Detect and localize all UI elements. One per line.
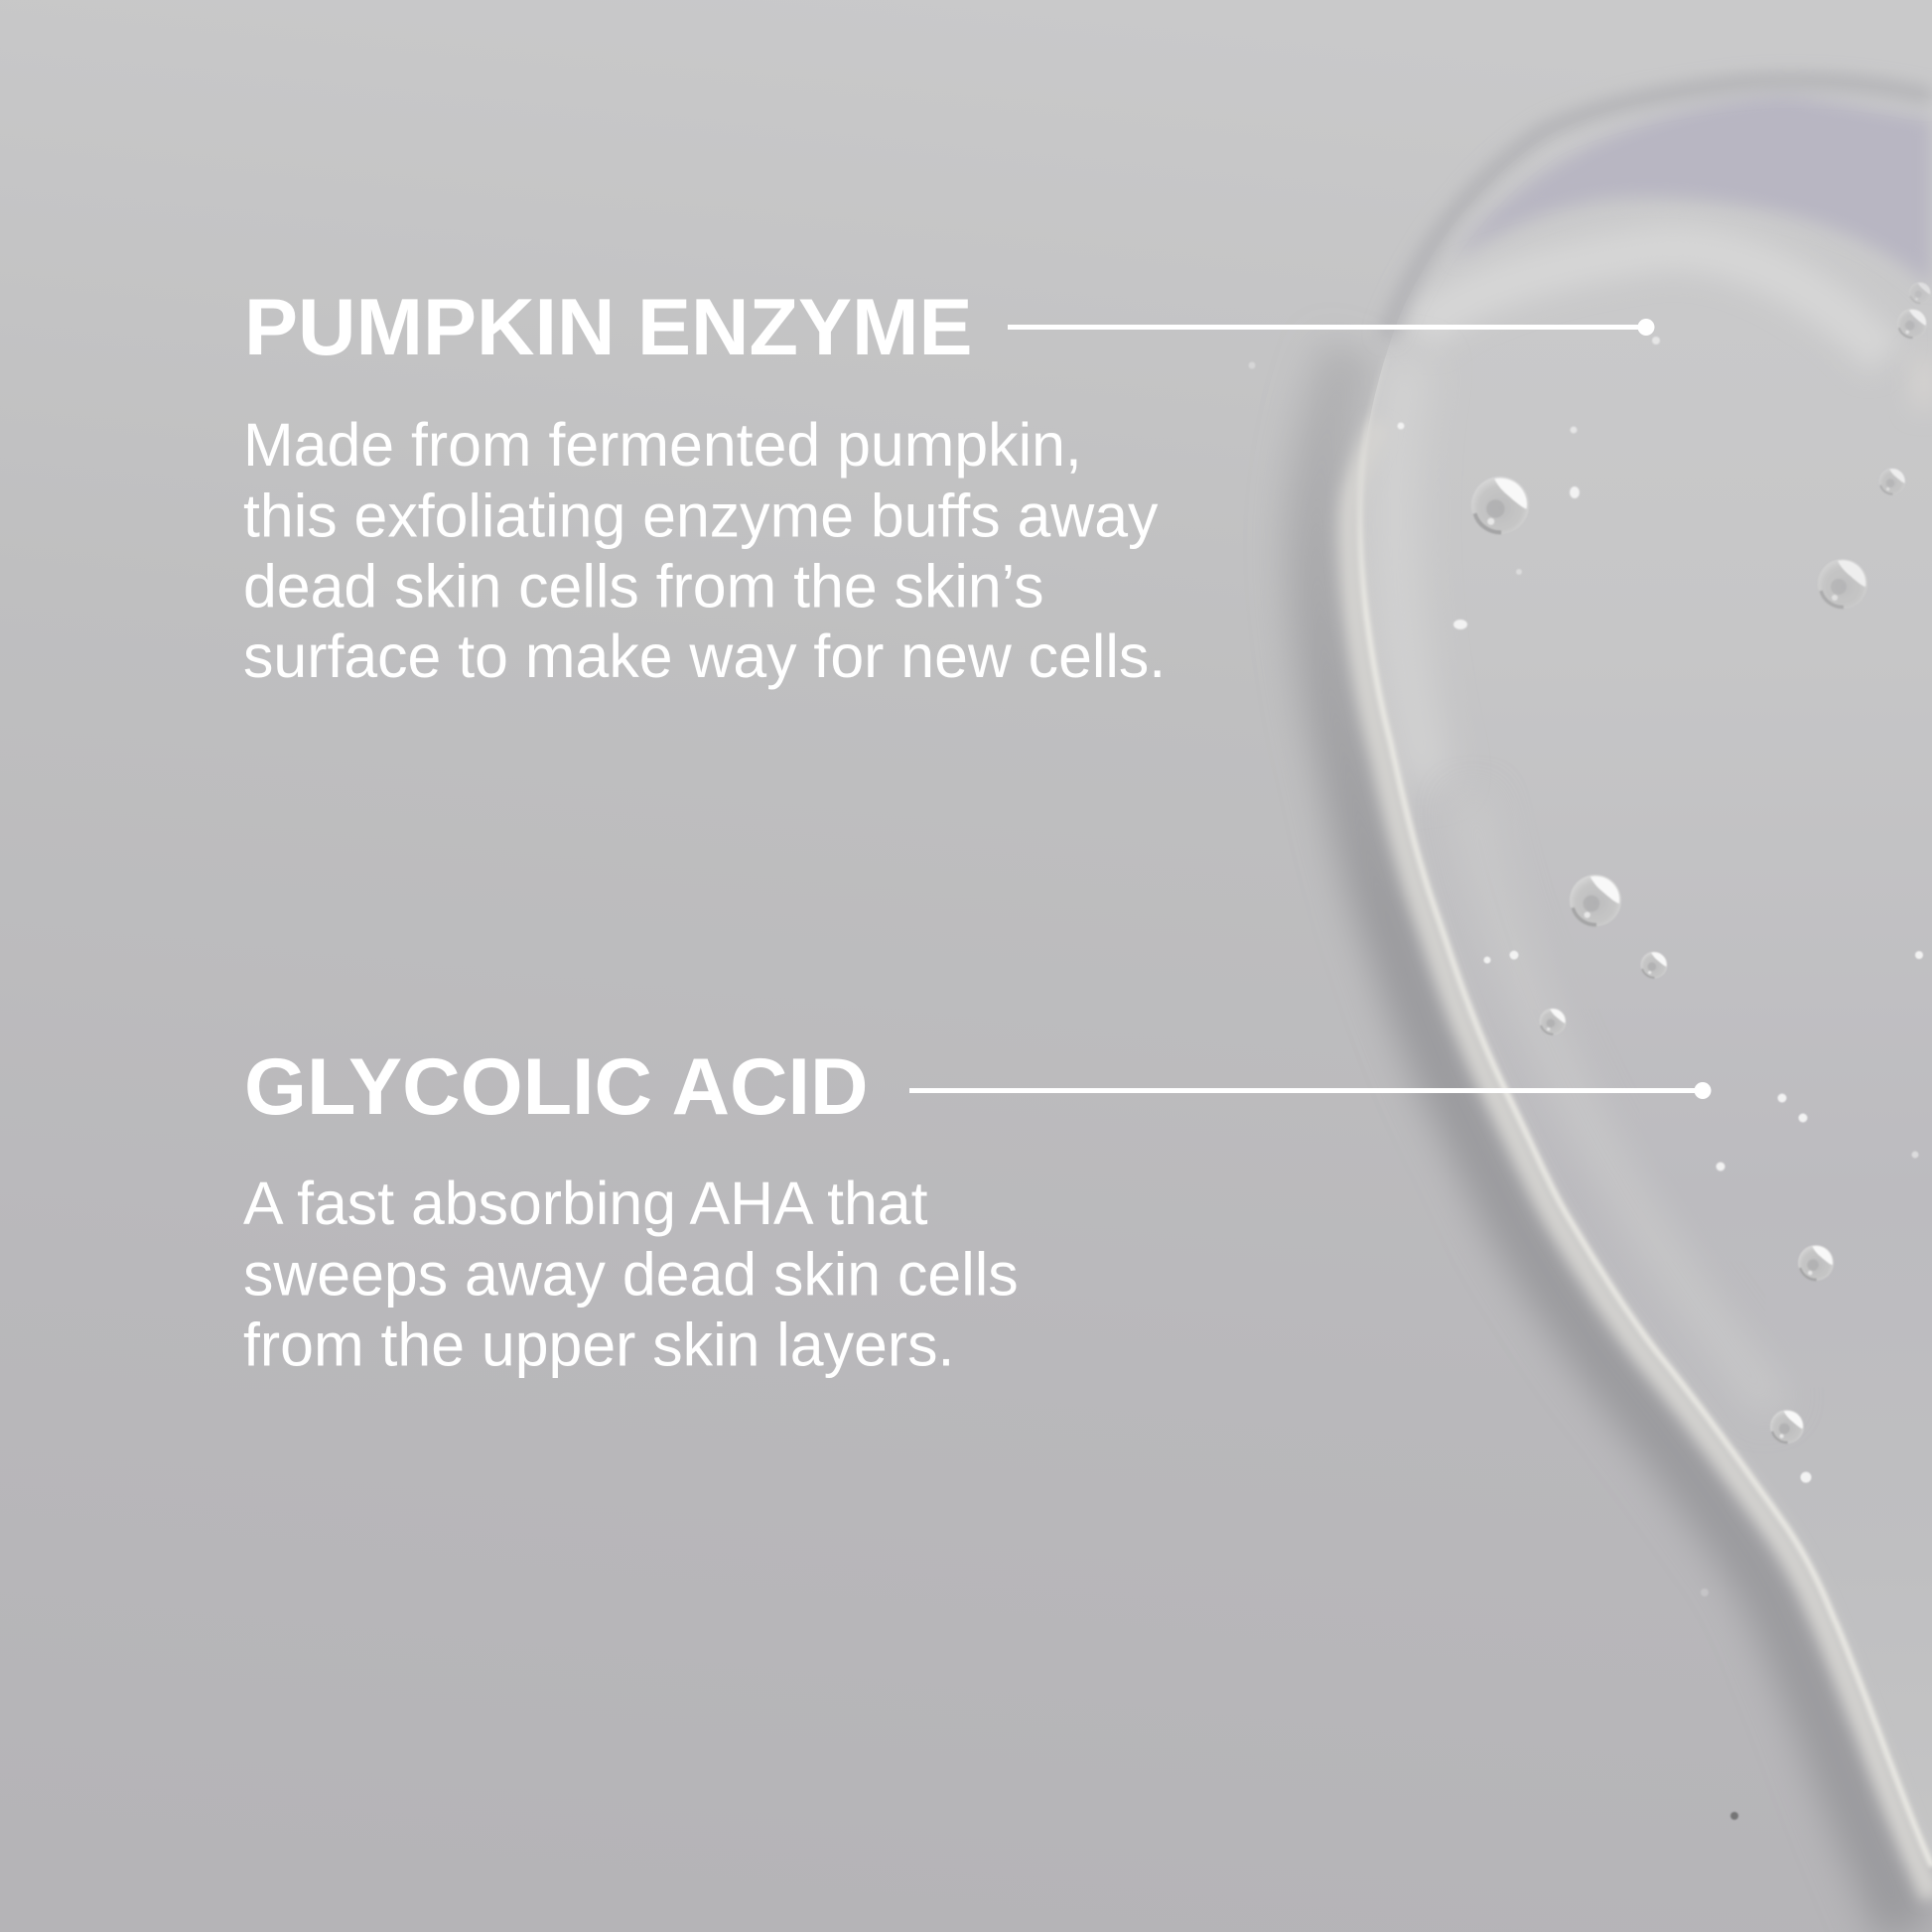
description: glycolic acid: sweeps away dead skin cells	[243, 1241, 1019, 1309]
description: pumpkin enzyme: Made from fermented pumpkin,	[243, 411, 1082, 479]
description: glycolic acid: from the upper skin layers.	[243, 1311, 954, 1378]
ingredient: pumpkin enzyme	[243, 283, 1654, 690]
gel bright edge	[1360, 357, 1932, 1866]
gel top rim	[1386, 81, 1932, 338]
callout line: glycolic acid	[909, 1082, 1712, 1099]
ingredient: glycolic acid	[243, 1042, 1712, 1378]
gel pale rim band	[1350, 423, 1932, 1897]
description: pumpkin enzyme: surface to make way for new cells.	[243, 622, 1166, 690]
description: pumpkin enzyme	[243, 411, 1166, 690]
callout line: pumpkin enzyme	[1008, 319, 1654, 336]
gel swatch	[1316, 81, 1932, 1932]
description: glycolic acid: A fast absorbing AHA that	[243, 1170, 928, 1237]
gel body	[1360, 84, 1932, 1866]
gel tinted upper bands	[1395, 94, 1932, 1410]
heading: pumpkin enzyme: PUMPKIN ENZYME	[244, 283, 973, 372]
description: glycolic acid	[243, 1170, 1019, 1378]
heading: glycolic acid: GLYCOLIC ACID	[244, 1042, 869, 1132]
gel bubbles	[1249, 282, 1931, 1820]
gel drop shadow	[1316, 348, 1908, 1932]
description: pumpkin enzyme: this exfoliating enzyme buffs away	[243, 483, 1159, 550]
description: pumpkin enzyme: dead skin cells from the skin’s	[243, 552, 1043, 620]
